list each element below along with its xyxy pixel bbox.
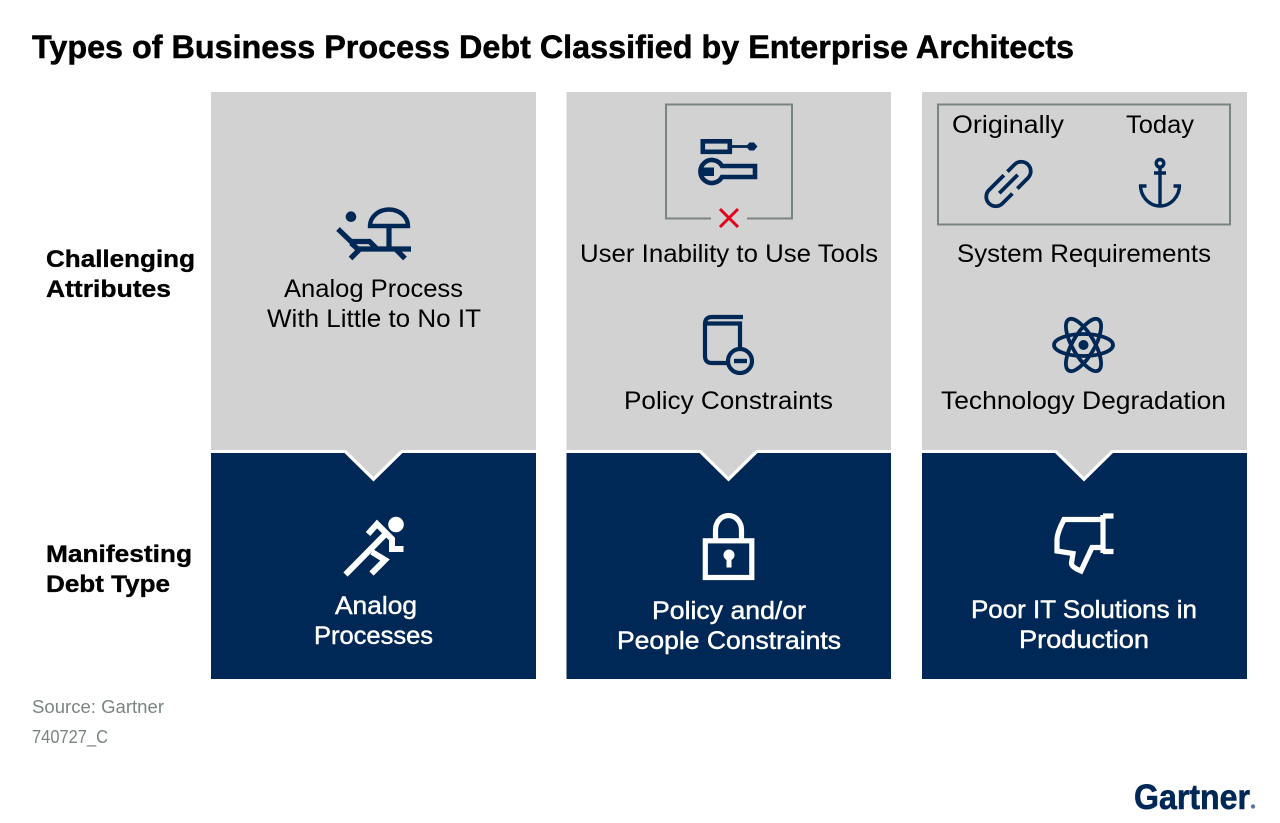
navy debt panel 3 [922,453,1247,679]
icon: red cross [720,209,738,227]
text: user inability: User Inability to Use Tools [580,240,878,268]
title: Types of Business Process Debt Classified by Enterprise Architects [32,29,1074,65]
icon: padlock [705,516,752,578]
row label: challenging attributes [46,246,195,303]
navy debt panel 2 [566,453,891,679]
text: poor IT solutions: Poor IT Solutions in [971,596,1197,624]
text: system requirements: System Requirements [957,240,1211,268]
text: originally: Originally [952,111,1065,139]
text: technology degradation: Technology Degradation [941,387,1226,415]
source note: 740727_C [32,727,108,748]
text: analog process: With Little to No IT [267,305,481,333]
icon: policy book [705,317,752,373]
row label: challenging attributes: Challenging [46,246,195,273]
panel: analog column [211,92,536,679]
text: poor IT solutions [971,596,1197,654]
text: analog processes: Processes [314,622,433,650]
tools box frame [666,104,792,218]
icon: lounge chair and umbrella [338,210,411,258]
text: policy and people constraints: Policy and/or [652,597,806,625]
gray attributes panel 2 [566,92,891,477]
icon: screwdriver and wrench [700,141,758,183]
row label: manifesting debt type: Debt Type [46,571,170,598]
system requirements box frame [938,104,1230,224]
icon: thumbs down [1057,515,1114,571]
logo: Gartner: Gartner [1134,778,1250,817]
text: analog processes: Analog [335,592,417,620]
row label: manifesting debt type: Manifesting [46,541,192,568]
row label: manifesting debt type [46,541,192,598]
source note [32,697,164,748]
text: policy and people constraints [617,597,841,655]
icon: running person [346,517,404,574]
navy debt panel 1 [211,453,536,679]
text: today: Today [1126,111,1195,139]
icon: chain link [982,158,1035,210]
source note: Source: Gartner [32,697,164,717]
text: policy constraints: Policy Constraints [624,387,833,415]
gray attributes panel 3 [922,92,1247,477]
row label: challenging attributes: Attributes [46,276,171,303]
panel: policy column [566,92,891,679]
text: analog process: Analog Process [284,275,463,303]
icon: atom [1054,314,1113,376]
gray attributes panel 1 [211,92,536,477]
text: poor IT solutions: Production [1019,626,1149,654]
text: analog processes [314,592,433,650]
text: policy and people constraints: People Constraints [617,627,841,655]
text: analog process [267,275,481,333]
icon: anchor [1139,160,1181,207]
panel: IT column [922,92,1247,679]
